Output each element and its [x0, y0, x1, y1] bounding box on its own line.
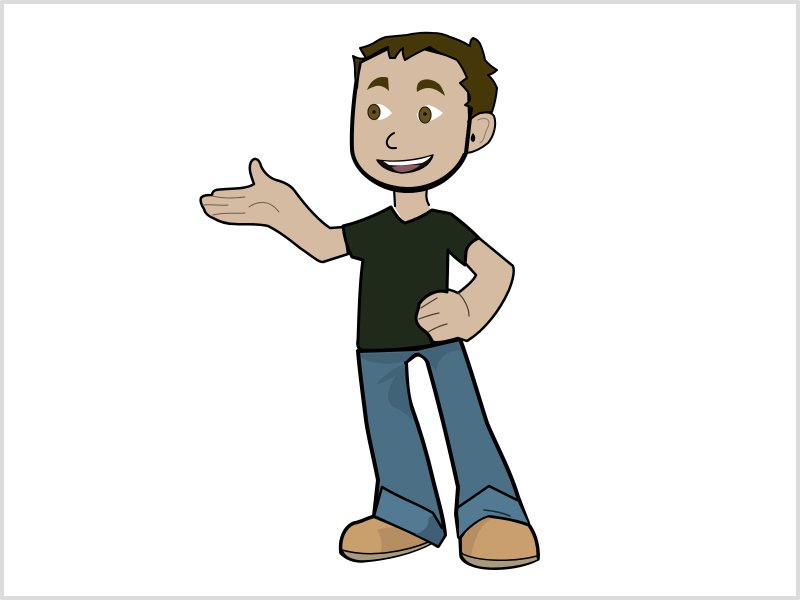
cuff fold lines: [374, 486, 517, 528]
hair: [353, 33, 497, 122]
jaw thick outline: [352, 150, 467, 193]
right eye: [417, 105, 443, 123]
cuff crease: [484, 510, 510, 516]
jeans: [358, 339, 528, 546]
ear: [467, 112, 495, 153]
right eyebrow: [417, 79, 445, 96]
neck: [394, 185, 432, 224]
left trouser cuff: [375, 488, 444, 545]
nose: [387, 133, 396, 148]
knuckle lines: [419, 293, 469, 332]
head: [352, 33, 497, 193]
left eye: [367, 104, 392, 120]
extended arm and open hand: [201, 159, 348, 262]
bent arm and fist on hip: [416, 232, 514, 342]
left eyebrow: [367, 77, 389, 91]
smiling mouth: [377, 155, 433, 173]
dark green t-shirt: [343, 207, 479, 350]
left shoe: [341, 516, 433, 561]
inner ear shadow: [471, 133, 475, 142]
ear inner detail: [478, 118, 489, 143]
character figure: [201, 33, 538, 568]
right shoe: [460, 516, 538, 568]
jeans shading: [361, 342, 462, 420]
face shape: [352, 42, 470, 190]
right trouser cuff: [459, 487, 528, 537]
finger and palm creases: [203, 196, 279, 215]
